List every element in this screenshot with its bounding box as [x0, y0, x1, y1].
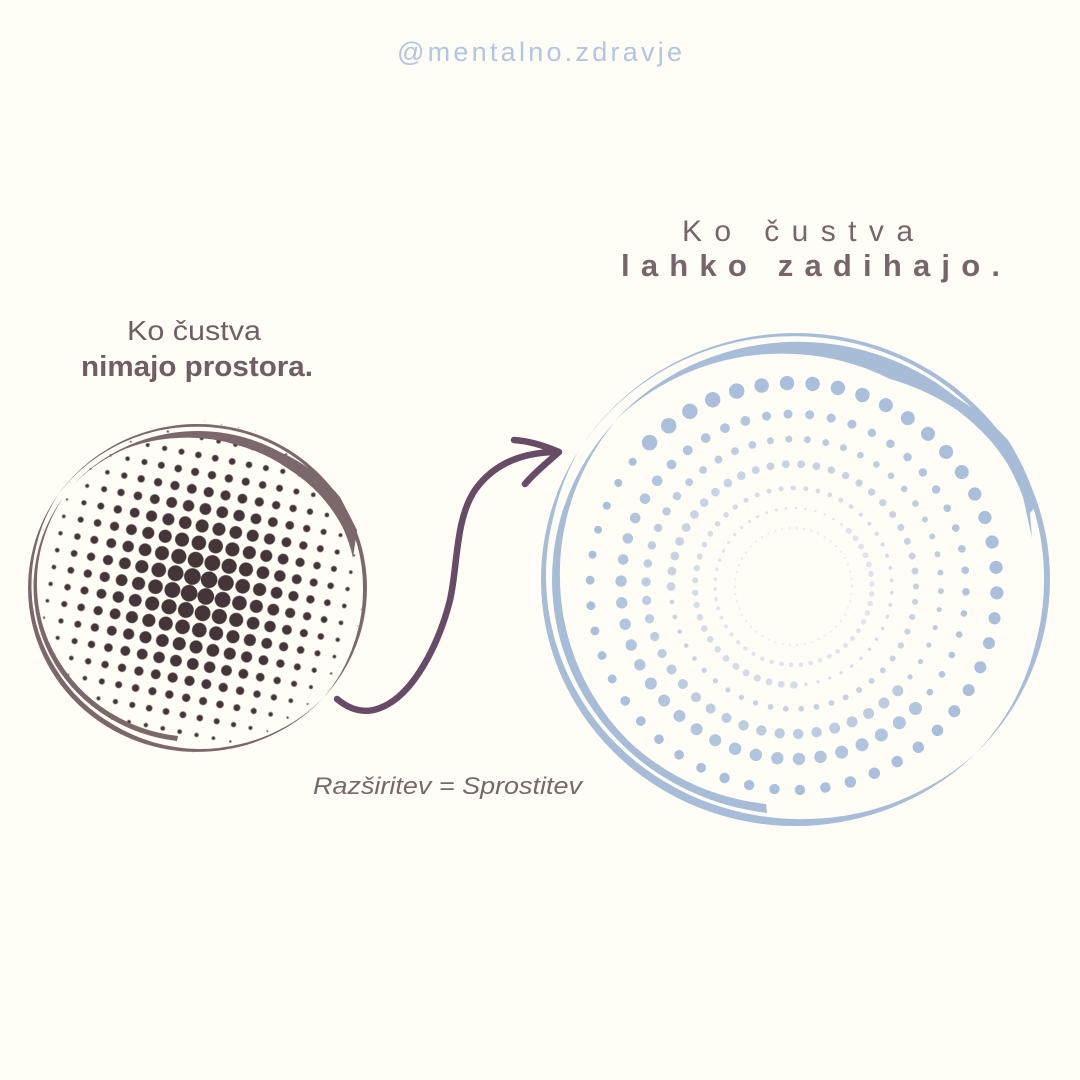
heading: left: nimajo prostora. — [81, 351, 313, 383]
ring 1 — [506, 299, 1080, 874]
ring 5 — [656, 449, 931, 724]
ring 7 — [735, 528, 852, 645]
heading: left — [81, 315, 313, 383]
ring 2 — [550, 343, 1037, 830]
heading: right: Ko čustva — [682, 215, 913, 248]
heading: right: lahko zadihajo. — [621, 248, 1000, 283]
heading: right — [621, 215, 1000, 283]
brush ring: large circle — [541, 333, 1050, 826]
heading: left: Ko čustva — [127, 315, 261, 346]
ring 6 — [682, 475, 905, 698]
ring 4 — [622, 415, 965, 758]
arrow — [337, 440, 559, 711]
brush ring: small circle — [28, 424, 367, 752]
dotted rings: large circle — [506, 299, 1080, 874]
handle text: @mentalno.zdravje — [397, 37, 682, 67]
halftone circle — [20, 410, 380, 760]
ring 3 — [585, 378, 1002, 795]
caption: Razširitev = Sprostitev — [313, 773, 584, 800]
